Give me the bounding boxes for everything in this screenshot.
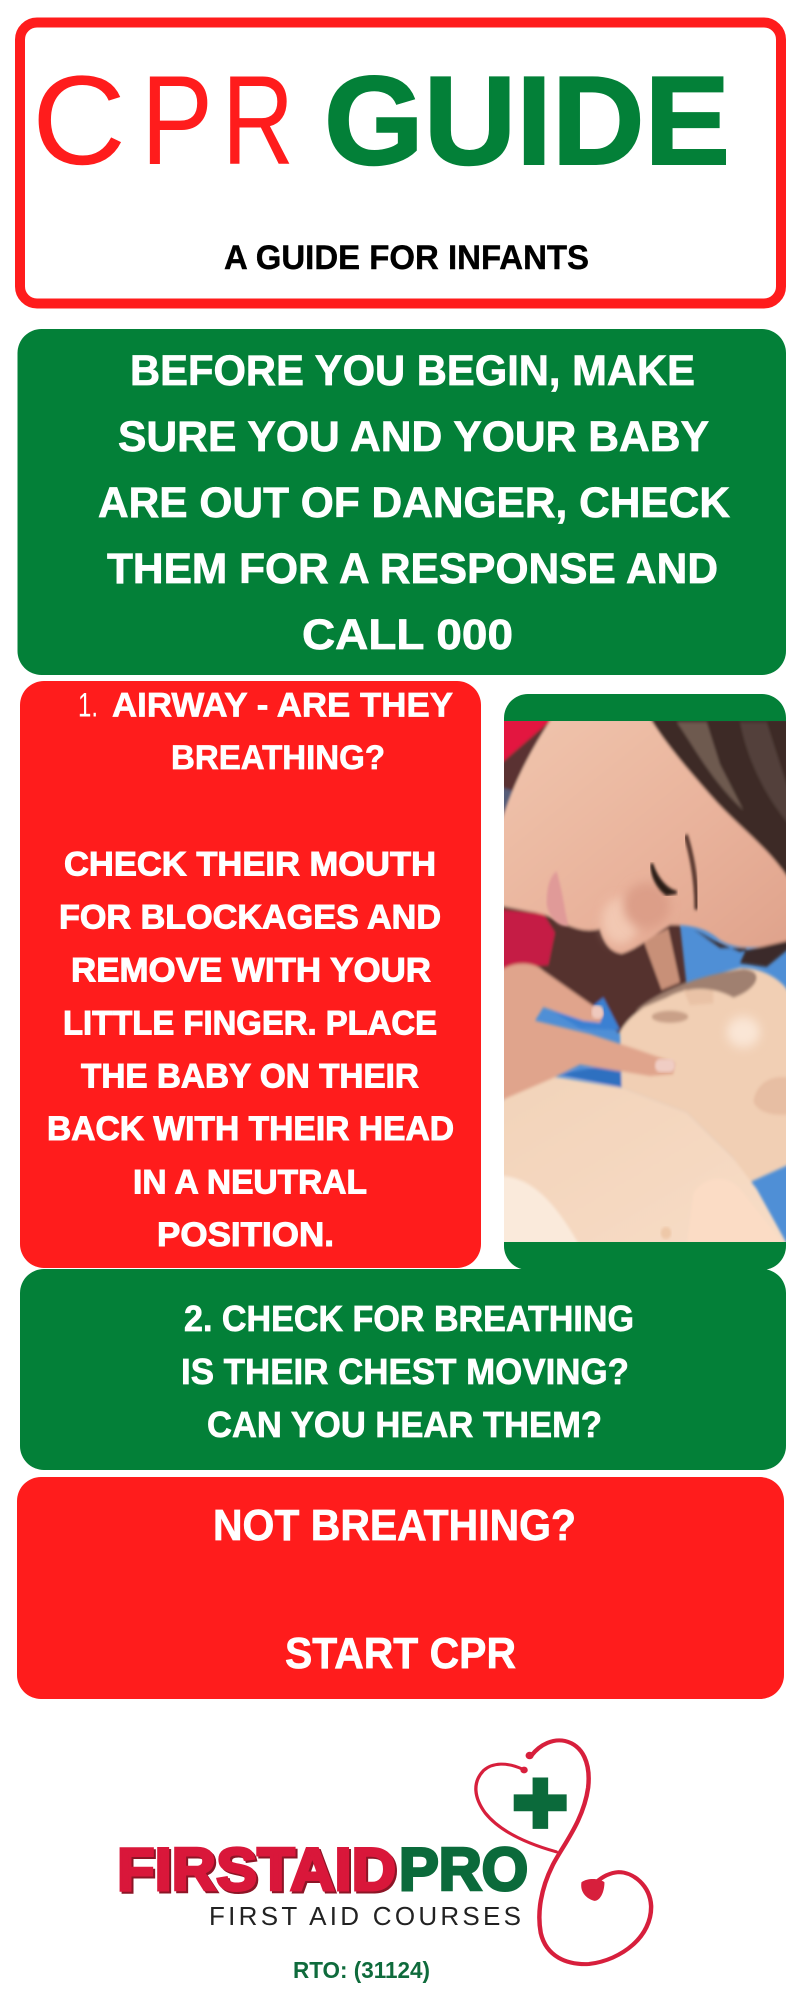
panel: step 1 airway xyxy=(20,681,481,1268)
before you begin text: CALL 000 xyxy=(302,612,513,659)
hair xyxy=(650,718,790,881)
step 1 heading xyxy=(78,686,453,777)
facial details xyxy=(547,871,568,926)
title: GUIDE: GUIDE xyxy=(324,50,730,191)
step 1 instructions xyxy=(47,846,454,1254)
start CPR text: START CPR xyxy=(285,1629,516,1678)
step 1 heading: AIRWAY - ARE THEY xyxy=(112,686,453,724)
step 1 instructions: BACK WITH THEIR HEAD xyxy=(47,1110,454,1148)
not breathing heading: NOT BREATHING? xyxy=(213,1501,576,1550)
panel: before you begin xyxy=(18,329,786,675)
rescuer face xyxy=(500,718,790,954)
rescuer hand xyxy=(500,964,675,1101)
icon: stethoscope heart xyxy=(476,1740,651,1964)
before you begin text xyxy=(98,348,730,659)
title: CPR: C xyxy=(32,49,126,191)
step 1 instructions: FOR BLOCKAGES AND xyxy=(59,898,441,936)
step 1 instructions: THE BABY ON THEIR xyxy=(81,1058,419,1096)
photo xyxy=(500,718,790,1246)
subtitle: A GUIDE FOR INFANTS xyxy=(224,239,589,277)
step 2 text: 2. CHECK FOR BREATHING xyxy=(184,1298,634,1339)
icon: green cross xyxy=(514,1777,567,1829)
RTO number: RTO: (31124) xyxy=(293,1957,430,1983)
panel: not breathing start CPR xyxy=(17,1477,784,1699)
step 1 instructions: POSITION. xyxy=(157,1216,334,1254)
title panel xyxy=(20,22,781,304)
title: CPR xyxy=(32,49,294,191)
step 1 heading: BREATHING? xyxy=(171,739,385,777)
step 1 heading: 1. xyxy=(78,686,98,724)
logo tagline: FIRST AID COURSES xyxy=(209,1901,521,1931)
step 1 instructions: LITTLE FINGER. PLACE xyxy=(63,1004,437,1042)
panel: step 2 check for breathing xyxy=(20,1269,786,1470)
logo wordmark: FIRSTAID: FIRSTAID xyxy=(119,1838,398,1905)
step 2 text: IS THEIR CHEST MOVING? xyxy=(181,1351,629,1392)
title: CPR: P xyxy=(141,49,213,191)
title: CPR: R xyxy=(222,49,294,191)
dark background left of face xyxy=(504,721,550,793)
before you begin text: ARE OUT OF DANGER, CHECK xyxy=(98,480,730,527)
photo panel: rescuer checking infant manikin xyxy=(500,694,790,1270)
red shirt xyxy=(504,721,552,764)
step 1 instructions: IN A NEUTRAL xyxy=(133,1164,367,1202)
step 2 text xyxy=(181,1298,634,1445)
logo: First Aid Pro xyxy=(117,1740,651,1983)
step 1 instructions: REMOVE WITH YOUR xyxy=(71,952,431,990)
before you begin text: BEFORE YOU BEGIN, MAKE xyxy=(130,348,695,395)
logo wordmark: FIRSTAID: PRO xyxy=(399,1836,528,1903)
before you begin text: THEM FOR A RESPONSE AND xyxy=(107,546,718,593)
baby body xyxy=(500,1077,788,1246)
before you begin text: SURE YOU AND YOUR BABY xyxy=(118,414,709,461)
logo wordmark: FIRSTAID xyxy=(117,1836,528,1905)
logo wordmark: FIRSTAID: FIRSTAID xyxy=(117,1836,396,1903)
step 1 instructions: CHECK THEIR MOUTH xyxy=(64,846,436,884)
step 2 text: CAN YOU HEAR THEM? xyxy=(207,1404,602,1445)
baby head xyxy=(620,968,790,1182)
